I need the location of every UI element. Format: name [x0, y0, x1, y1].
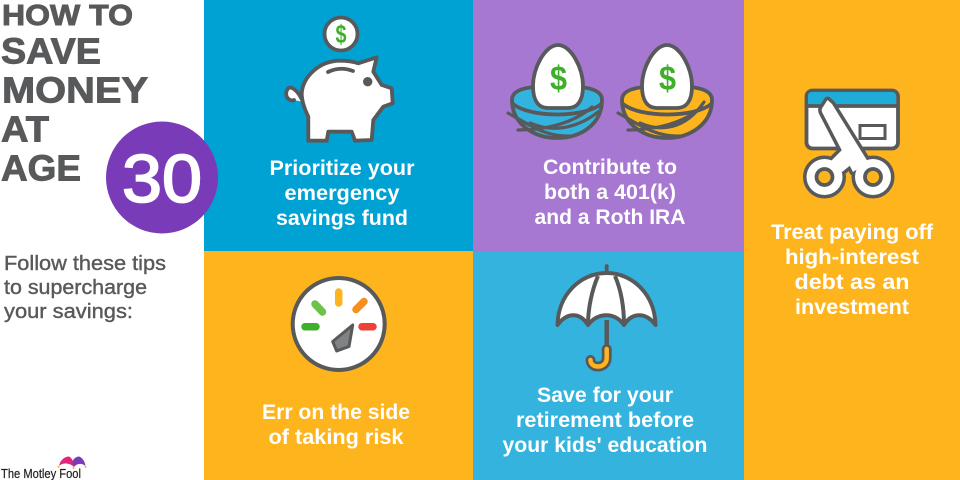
- icon: yellow nest egg: $: [659, 60, 676, 98]
- text: 401k and Roth: Contribute to: [543, 155, 677, 179]
- title: [1, 0, 148, 188]
- logo: The Motley Fool: [1, 456, 86, 480]
- text: debt: debt as an: [794, 270, 910, 294]
- text: emergency savings: Prioritize your: [270, 156, 415, 180]
- title: HOW TO: [2, 0, 133, 32]
- icon: yellow nest egg: [618, 45, 712, 138]
- text: emergency savings: savings fund: [276, 206, 408, 230]
- title: MONEY: [2, 70, 148, 110]
- intro text: your savings:: [4, 300, 133, 323]
- icon: scissors and card: [806, 90, 898, 195]
- icon: umbrella: [558, 266, 656, 367]
- badge: age 30: 30: [122, 141, 202, 217]
- panel: 401k and Roth: [473, 0, 744, 251]
- text: debt: [771, 220, 934, 319]
- badge: age 30: [106, 122, 218, 234]
- text: retirement: retirement before: [516, 408, 694, 432]
- title: AGE: [1, 148, 81, 188]
- text: debt: investment: [795, 295, 909, 319]
- text: risk: [262, 400, 410, 449]
- icon: blue nest egg: $: [550, 60, 567, 98]
- text: debt: Treat paying off: [771, 220, 934, 244]
- text: emergency savings: emergency: [284, 181, 400, 205]
- text: retirement: your kids' education: [502, 433, 708, 457]
- panel: debt: [744, 0, 960, 480]
- icon: piggy bank: [286, 57, 393, 141]
- text: debt: high-interest: [785, 245, 919, 269]
- intro text: to supercharge: [4, 276, 147, 299]
- icon: coin: [324, 18, 358, 50]
- title: AT: [1, 108, 49, 150]
- text: 401k and Roth: [534, 155, 686, 229]
- text: 401k and Roth: both a 401(k): [544, 180, 676, 204]
- text: retirement: [502, 383, 708, 457]
- icon: gauge: [293, 278, 385, 370]
- text: risk: Err on the side: [262, 400, 410, 424]
- text: emergency savings: [270, 156, 415, 230]
- title: SAVE: [1, 30, 101, 72]
- intro text: Follow these tips: [4, 252, 166, 275]
- icon: blue nest egg: [508, 45, 602, 138]
- panel: retirement: [473, 251, 744, 480]
- panel: emergency savings: [204, 0, 473, 251]
- intro text: [4, 252, 166, 323]
- text: risk: of taking risk: [268, 425, 404, 449]
- text: retirement: Save for your: [537, 383, 674, 407]
- panel: risk: [204, 251, 473, 480]
- icon: coin: $: [336, 19, 347, 49]
- text: 401k and Roth: and a Roth IRA: [534, 205, 686, 229]
